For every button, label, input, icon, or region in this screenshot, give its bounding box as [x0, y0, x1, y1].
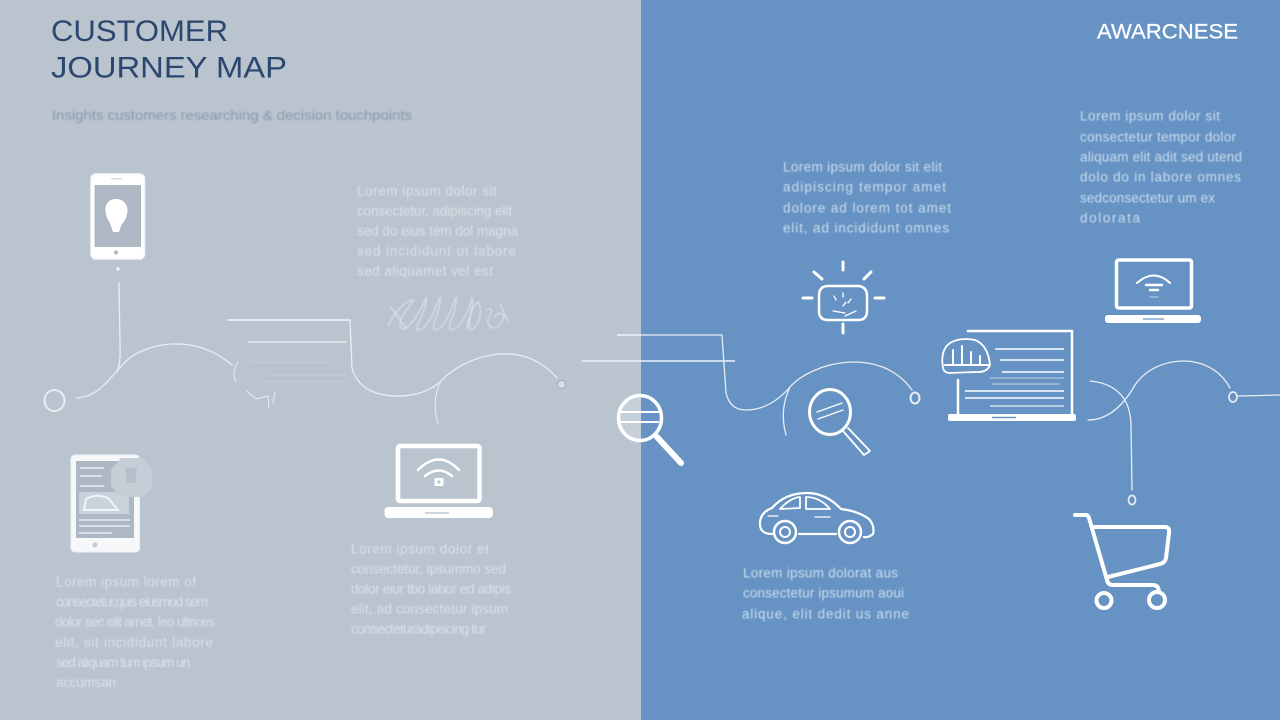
- text block: bottom left: elit, sit incididunt labore: [55, 635, 213, 650]
- text block: bottom left: consectetur,quis eiusmod sem: [56, 594, 208, 610]
- text block: bottom right centre: [742, 566, 909, 622]
- text block: bottom centre left: dolor eiur tbo labor ed adipis: [351, 582, 511, 596]
- title: JOURNEY MAP: [51, 52, 287, 84]
- text block: top centre left: sed do eius tem dol magna: [357, 224, 518, 238]
- text block: top right: consectetur tempor dolor: [1080, 130, 1236, 144]
- text block: bottom left: [55, 574, 215, 690]
- icon: laptop with article: [942, 331, 1076, 421]
- icon: magnifier: [810, 390, 870, 455]
- text block: top right centre: [783, 160, 951, 236]
- icon: smartphone: [91, 174, 144, 271]
- text block: top right: aliquam elit adit sed utend: [1080, 150, 1242, 164]
- panel: right background: [641, 0, 1280, 720]
- text block: bottom centre left: consecteturadipiscing tur: [351, 622, 486, 636]
- text block: top right: sedconsectetur um ex: [1080, 190, 1215, 206]
- title: CUSTOMER: [51, 15, 228, 48]
- icon: magnifier on the panel split: [618, 395, 681, 463]
- journey path: left section: [44, 283, 641, 423]
- text block: bottom centre left: elit, ad consectetur ipsum: [351, 602, 508, 616]
- text block: top centre left: sed incididunt ut labore: [357, 244, 516, 258]
- icon: car: [760, 493, 874, 543]
- text block: top right centre: dolore ad lorem tot amet: [783, 200, 951, 216]
- text block: top centre left: Lorem ipsum dolor sit: [357, 184, 497, 198]
- journey doodle scribble: [388, 298, 508, 330]
- text block: top right: Lorem ipsum dolor sit: [1080, 108, 1220, 124]
- text block: top right: dolorata: [1080, 210, 1140, 226]
- text block: bottom centre left: Lorem ipsum dolor et: [351, 542, 489, 556]
- text block: top right centre: elit, ad incididunt omnes: [783, 220, 949, 236]
- heading: stage name: AWARCNESE: [1097, 20, 1238, 44]
- journey path: right section: [641, 335, 1280, 504]
- text block: bottom left: accumsan: [56, 675, 116, 690]
- icon: light bulb idea: [803, 262, 884, 333]
- text block: top right: [1080, 108, 1242, 226]
- text block: bottom left: Lorem ipsum lorem of: [56, 574, 196, 590]
- text block: top centre left: sed aliquamet vel est: [357, 264, 493, 278]
- icon: tablet badge: [111, 458, 152, 497]
- text block: bottom left: dolor sec elit amet, leo ultrices: [55, 614, 215, 630]
- icon: laptop with wifi (left): [384, 446, 493, 518]
- text block: bottom right centre: alique, elit dedit us anne: [742, 606, 909, 622]
- text block: top right centre: Lorem ipsum dolor sit elit: [783, 160, 942, 174]
- icon: image thumbnail on laptop: [942, 339, 990, 373]
- text block: top right centre: adipiscing tempor amet: [783, 180, 946, 194]
- text block: bottom left: sed aliquam tum ipsum un: [56, 655, 190, 670]
- title: [51, 15, 287, 84]
- text block: bottom centre left: [351, 542, 511, 636]
- text block: bottom centre left: consectetur, ipsummo sed: [351, 562, 506, 576]
- text block: top centre left: [357, 184, 518, 278]
- icon: laptop with wifi (right): [1105, 260, 1201, 323]
- text block: top right: dolo do in labore omnes: [1080, 170, 1241, 184]
- text block: bottom right centre: consectetur ipsumum aoui: [743, 586, 904, 600]
- icon: shopping cart: [1075, 515, 1169, 608]
- subtitle: Insights customers researching & decision touchpoints: [52, 107, 412, 123]
- text block: top centre left: consectetur, adipiscing elit: [357, 204, 512, 218]
- icon: tablet with badge: [71, 455, 152, 552]
- panel: left background: [0, 0, 641, 720]
- text block: bottom right centre: Lorem ipsum dolorat aus: [743, 566, 898, 580]
